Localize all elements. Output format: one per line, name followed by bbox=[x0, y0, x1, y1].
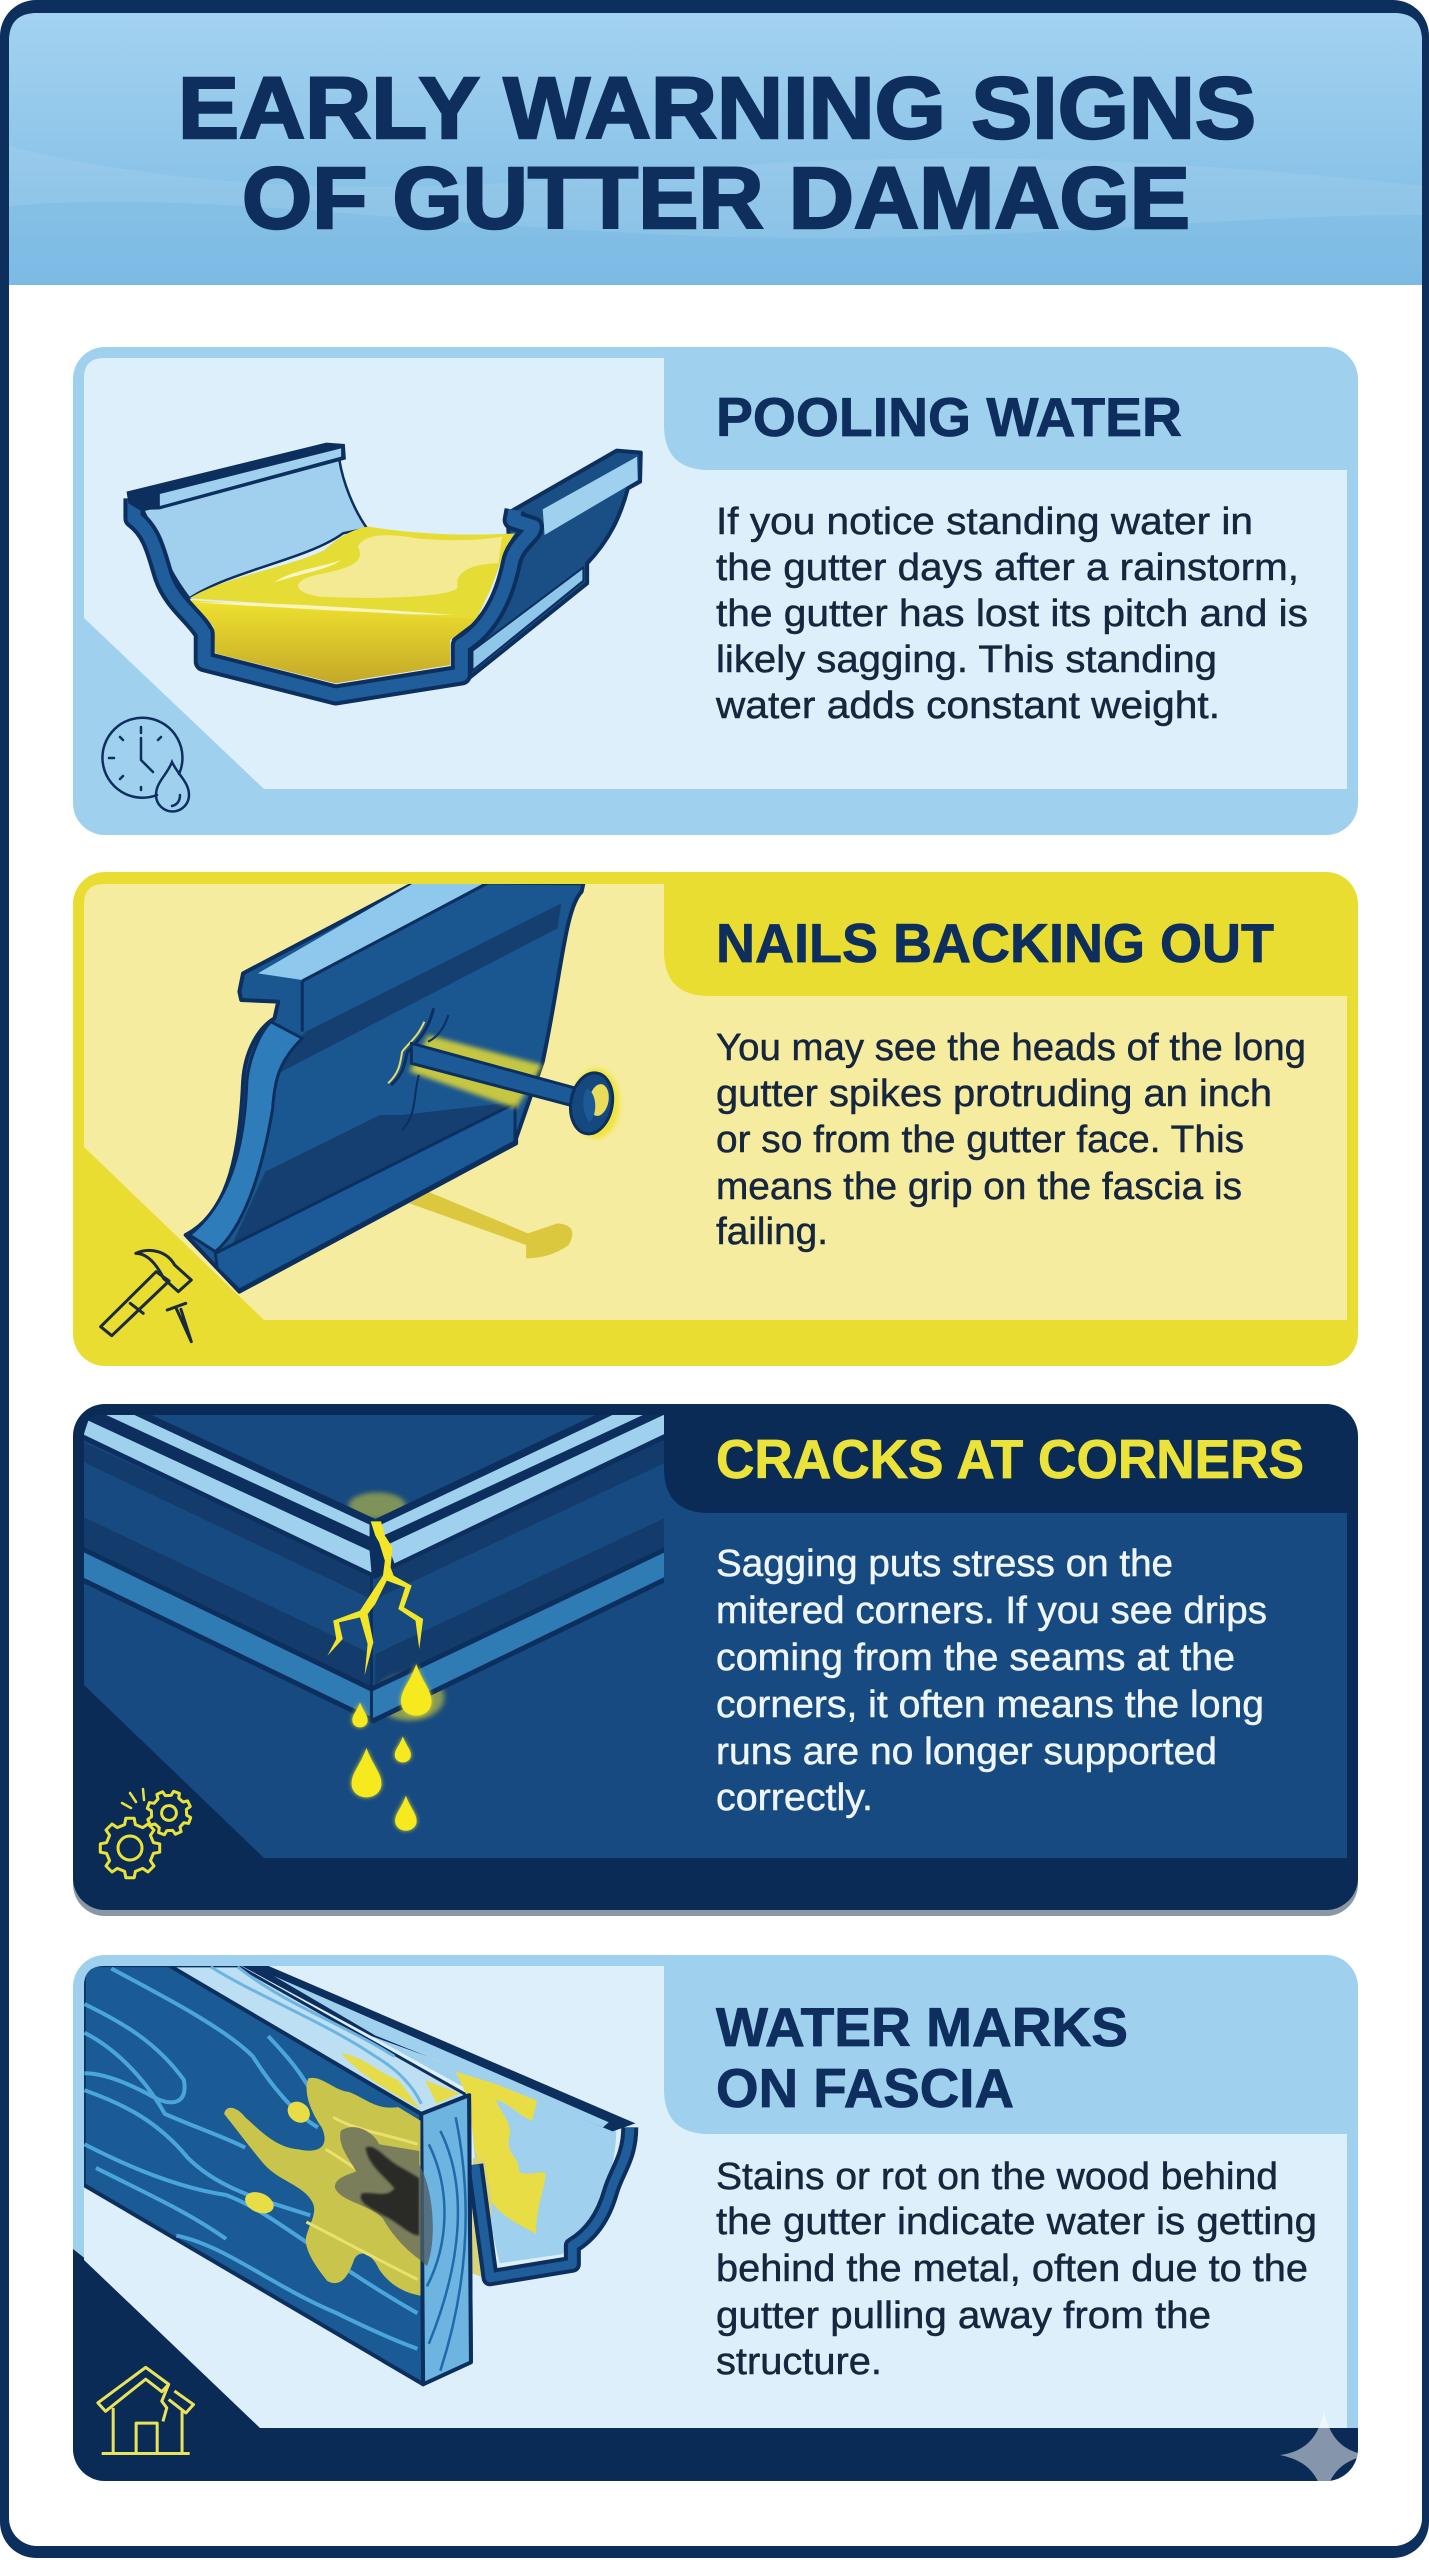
body text: the gutter days after a rainstorm, bbox=[716, 547, 1299, 589]
body text: means the grip on the fascia is bbox=[716, 1166, 1242, 1208]
body text: failing. bbox=[716, 1211, 828, 1253]
body text bbox=[716, 1428, 1304, 1819]
icon: clock and water drop bbox=[102, 718, 189, 812]
body text: If you notice standing water in bbox=[716, 501, 1253, 543]
body text bbox=[716, 1996, 1317, 2383]
body text: corners, it often means the long bbox=[716, 1684, 1264, 1726]
body text: gutter spikes protruding an inch bbox=[716, 1073, 1272, 1115]
illustration: stained fascia board behind gutter bbox=[84, 1965, 635, 2384]
panel: cracks at corners bbox=[73, 1404, 1358, 1916]
title: OF GUTTER DAMAGE bbox=[242, 150, 1190, 247]
body text: behind the metal, often due to the bbox=[716, 2248, 1308, 2290]
title: EARLY WARNING SIGNS bbox=[178, 60, 1256, 157]
icon: hammer and nail bbox=[101, 1250, 191, 1342]
panel: nails backing out bbox=[73, 872, 1358, 1366]
body text: You may see the heads of the long bbox=[716, 1027, 1306, 1069]
body text bbox=[715, 386, 1308, 727]
body text: mitered corners. If you see drips bbox=[716, 1590, 1267, 1632]
body text: Stains or rot on the wood behind bbox=[716, 2156, 1278, 2198]
body text: Sagging puts stress on the bbox=[716, 1543, 1173, 1585]
illustration: mitered corner with crack and drips bbox=[81, 1414, 666, 1831]
body text: correctly. bbox=[716, 1777, 873, 1819]
body text: the gutter indicate water is getting bbox=[716, 2201, 1317, 2243]
body text: the gutter has lost its pitch and is bbox=[716, 593, 1308, 635]
body text: runs are no longer supported bbox=[716, 1731, 1217, 1773]
illustration: gutter with protruding nail bbox=[186, 882, 619, 1292]
header banner bbox=[9, 13, 1422, 285]
body text: likely sagging. This standing bbox=[716, 639, 1217, 681]
icon: cracked gears bbox=[100, 1785, 197, 1878]
heading: nails backing out: NAILS BACKING OUT bbox=[716, 912, 1274, 974]
body text: water adds constant weight. bbox=[715, 685, 1220, 727]
heading: cracks at corners: CRACKS AT CORNERS bbox=[716, 1428, 1304, 1490]
panel: pooling water bbox=[73, 347, 1358, 835]
body text: or so from the gutter face. This bbox=[716, 1119, 1244, 1161]
icon: damaged house bbox=[98, 2367, 194, 2454]
illustration: gutter holding pooled yellow water bbox=[127, 443, 641, 695]
body text bbox=[716, 912, 1306, 1253]
body text: coming from the seams at the bbox=[716, 1637, 1235, 1679]
panel: water marks on fascia bbox=[73, 1955, 1368, 2500]
body text: gutter pulling away from the bbox=[716, 2295, 1211, 2337]
heading: water marks on fascia bbox=[716, 1996, 1128, 2119]
heading: water marks on fascia: ON FASCIA bbox=[716, 2057, 1014, 2119]
heading: pooling water: POOLING WATER bbox=[716, 386, 1182, 448]
icon: sparkle watermark bbox=[1280, 2412, 1358, 2481]
heading: water marks on fascia: WATER MARKS bbox=[716, 1996, 1128, 2058]
body text: structure. bbox=[716, 2341, 882, 2383]
title bbox=[178, 60, 1256, 247]
